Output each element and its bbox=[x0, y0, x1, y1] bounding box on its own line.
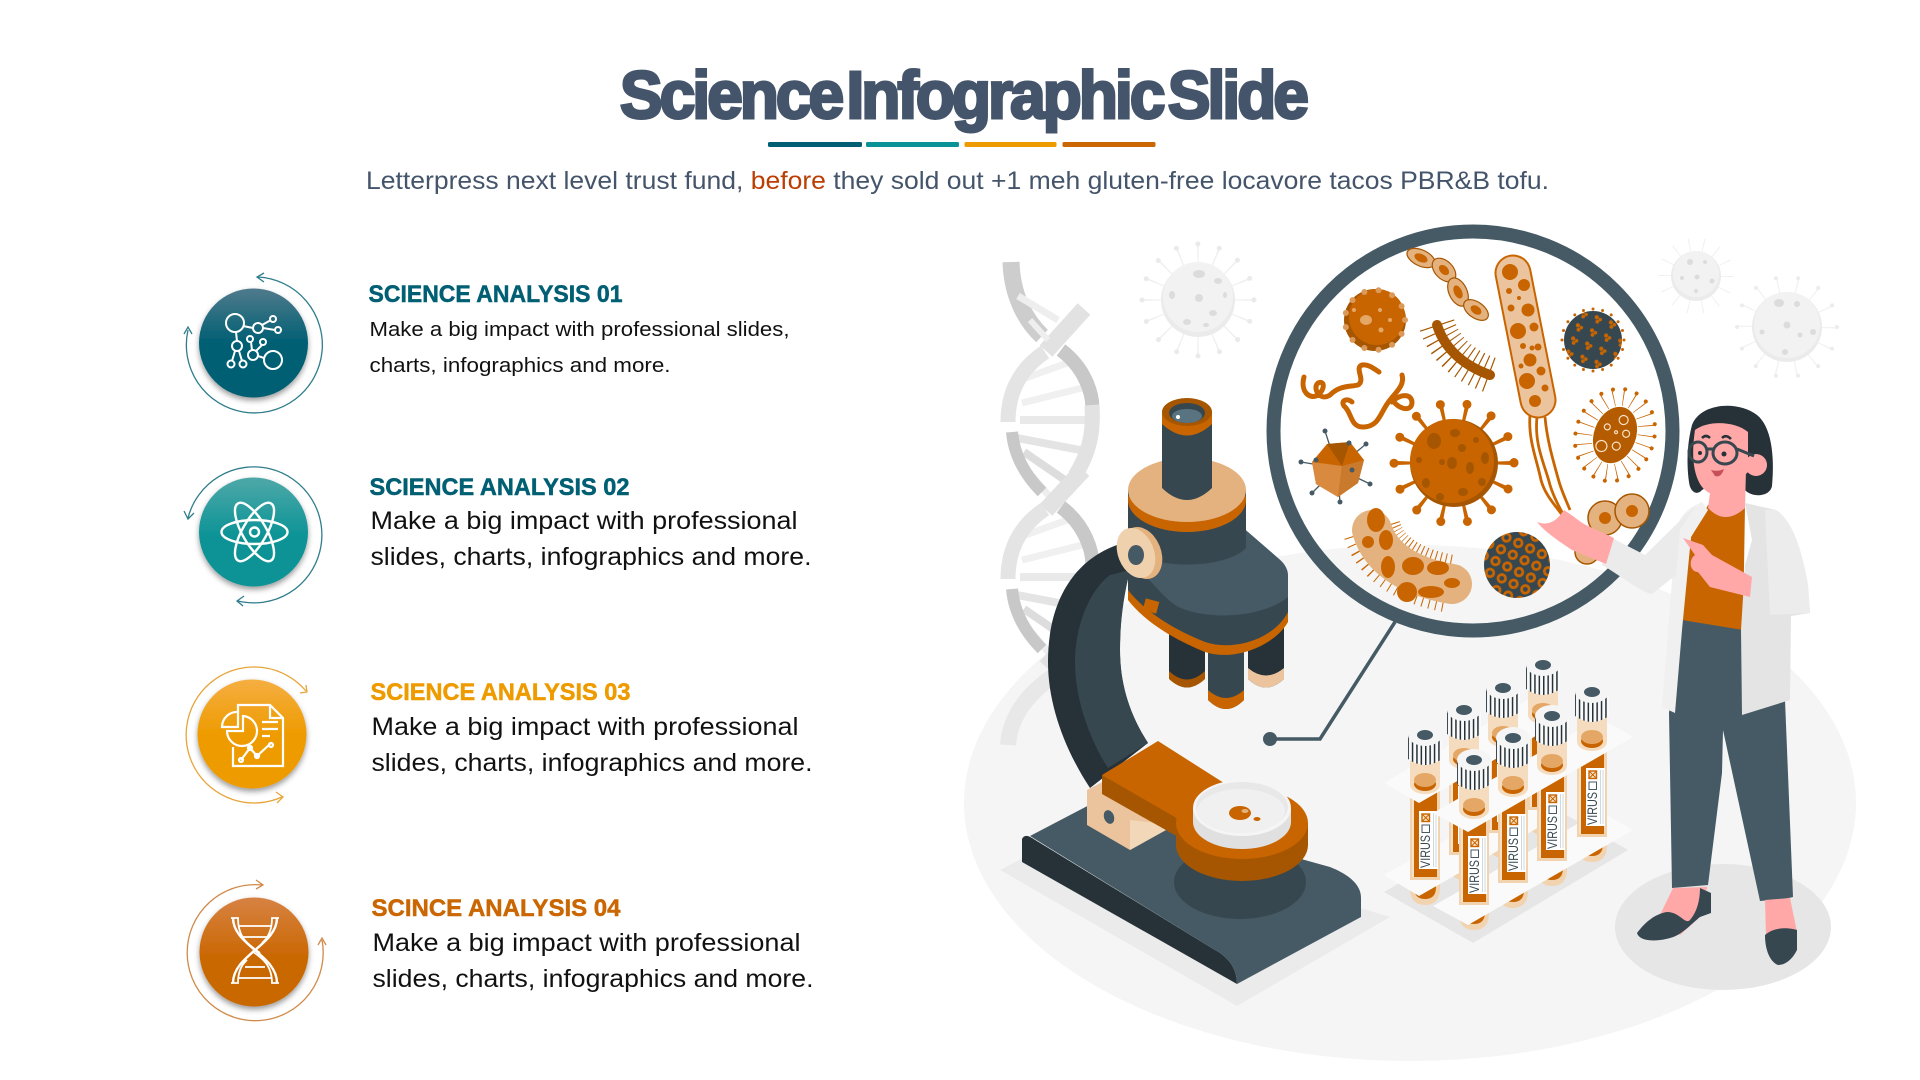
microscope tan block bbox=[1087, 778, 1175, 850]
microbe: polyhedral virus bbox=[1298, 428, 1372, 504]
subtitle: Letterpress next level trust fund, before they sold out +1 meh gluten-free locavore tacos PBR&B tofu. bbox=[366, 167, 1549, 195]
microbe: wavy spirochete bbox=[1303, 365, 1412, 427]
circular arrow 04 bbox=[187, 880, 326, 1021]
connector line from lens to stage bbox=[1263, 622, 1395, 746]
icon: dna helix bbox=[231, 918, 279, 983]
icon: report document bbox=[222, 705, 283, 766]
microbe: bead chain bbox=[1404, 244, 1492, 325]
microscope base shadow bbox=[1000, 825, 1390, 1006]
rack floor shadow bbox=[1384, 800, 1628, 943]
microscope base plate bbox=[1022, 802, 1361, 984]
scientist face bbox=[1693, 423, 1767, 495]
circular arrow 02 bbox=[184, 467, 322, 606]
heading 01: SCIENCE ANALYSIS 01 bbox=[368, 281, 622, 308]
description 04: slides, charts, infographics and more. bbox=[372, 965, 814, 993]
panel: science analysis 02 bbox=[184, 467, 812, 606]
microbe: bumpy brown ball bbox=[1344, 289, 1406, 351]
panel: science analysis 01 bbox=[184, 273, 790, 413]
back rack bbox=[1384, 654, 1567, 905]
scientist feet and shoes bbox=[1637, 887, 1797, 965]
title underline: four colour bars bbox=[768, 142, 1156, 147]
grey virus: top right small bbox=[1665, 245, 1727, 307]
microscope bbox=[1000, 398, 1390, 1006]
microbe: dark patterned ball bbox=[1484, 532, 1550, 598]
front rack: VIRUS bbox=[1506, 838, 1521, 871]
description 01: charts, infographics and more. bbox=[370, 354, 670, 377]
scientist trousers bbox=[1669, 615, 1793, 901]
background dna helix bbox=[1008, 262, 1092, 745]
microscope body bbox=[1128, 490, 1288, 655]
floor ellipse background bbox=[964, 545, 1856, 1061]
scientist lab coat bbox=[1602, 502, 1810, 715]
heading 03: SCIENCE ANALYSIS 03 bbox=[370, 679, 630, 706]
microbes inside lens bbox=[1298, 244, 1668, 602]
panel: science analysis 03 bbox=[186, 667, 813, 803]
scientist hair bbox=[1688, 406, 1773, 495]
microbe: hairy centipede bbox=[1437, 325, 1490, 375]
front rack: VIRUS bbox=[1545, 816, 1560, 849]
description 04: Make a big impact with professional bbox=[372, 929, 800, 957]
panel: science analysis 04 bbox=[187, 880, 813, 1021]
icon badge 04 bbox=[200, 898, 308, 1006]
icon badge 02 bbox=[199, 478, 308, 586]
microscope focus knob bbox=[1110, 521, 1170, 585]
front rack bbox=[1433, 681, 1633, 930]
front rack: VIRUS bbox=[1585, 792, 1600, 825]
scientist bbox=[1537, 406, 1810, 965]
scientist pointing hand bbox=[1683, 538, 1752, 597]
description 02: Make a big impact with professional bbox=[370, 507, 798, 535]
grey virus: top right large bbox=[1737, 277, 1837, 377]
microscope arm bbox=[1048, 545, 1148, 788]
microbe: large spiky virus bbox=[1394, 403, 1514, 523]
microbe: hairy spotted bacterium bbox=[1362, 508, 1460, 602]
circular arrow 01 bbox=[184, 273, 322, 413]
scientist neck bbox=[1708, 470, 1746, 517]
microbe: long bacillus with flagella bbox=[1502, 264, 1570, 522]
magnifier lens ring bbox=[1274, 232, 1672, 630]
icon badge 03 bbox=[198, 680, 306, 788]
heading 04: SCINCE ANALYSIS 04 bbox=[372, 895, 621, 922]
front rack: VIRUS bbox=[1467, 860, 1482, 893]
description 03: Make a big impact with professional bbox=[372, 713, 798, 741]
microbe: dark round with orange clusters bbox=[1562, 309, 1624, 371]
description 01: Make a big impact with professional slides, bbox=[370, 318, 790, 341]
grey virus: left bbox=[1142, 244, 1254, 356]
microscope stage bbox=[1102, 741, 1308, 881]
circular arrow 03 bbox=[186, 667, 307, 803]
title: Science Infographic Slide bbox=[620, 58, 1307, 133]
floor shadow under scientist bbox=[1615, 864, 1831, 990]
microscope collar and eyepiece bbox=[1128, 398, 1246, 532]
test tube rack bbox=[1384, 654, 1633, 943]
description 02: slides, charts, infographics and more. bbox=[370, 543, 812, 571]
back rack: VIRUS bbox=[1418, 835, 1433, 868]
petri dish bbox=[1193, 780, 1291, 849]
microbe: spiky oval bbox=[1562, 377, 1668, 493]
description 03: slides, charts, infographics and more. bbox=[372, 749, 812, 777]
scientist extended hand bbox=[1537, 510, 1614, 564]
scientist glasses bbox=[1689, 442, 1754, 464]
heading 02: SCIENCE ANALYSIS 02 bbox=[370, 474, 630, 501]
icon: atom bbox=[222, 497, 288, 567]
icon badge 01 bbox=[199, 288, 308, 398]
microbe: paired cocci bbox=[1575, 494, 1649, 564]
icon: network nodes bbox=[226, 314, 282, 369]
microscope objective lenses bbox=[1169, 625, 1284, 709]
scientist shirt bbox=[1682, 505, 1745, 630]
